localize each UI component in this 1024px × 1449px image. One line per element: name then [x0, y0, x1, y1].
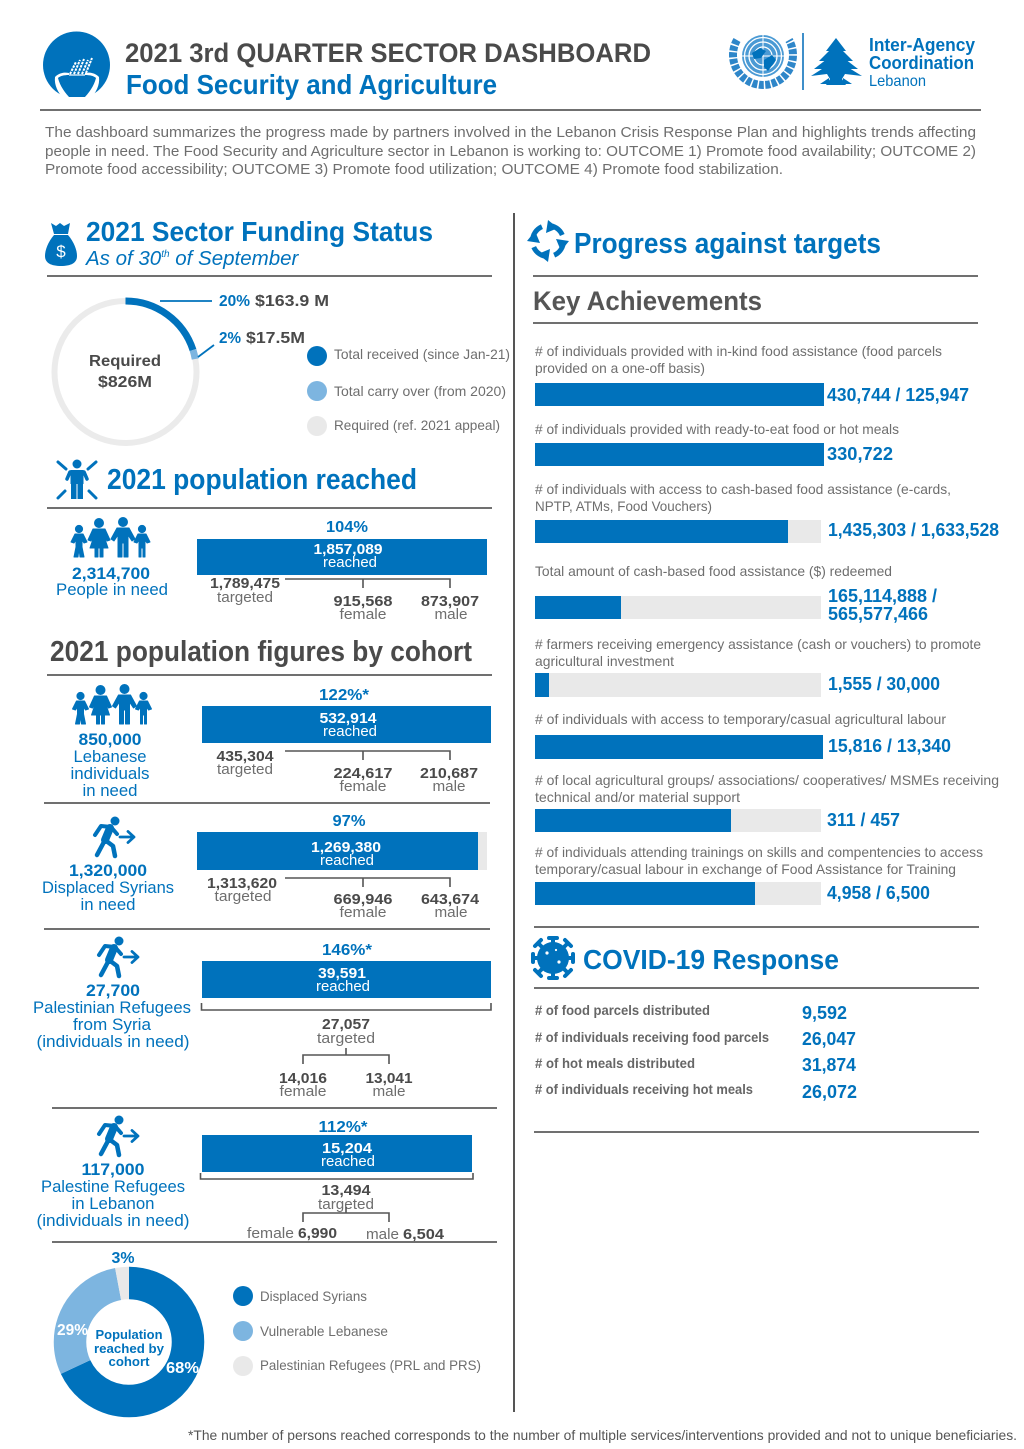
stat: Lebanese in need: Lebanese: [74, 747, 146, 766]
legend: cohort: Vulnerable Lebanese: [260, 1323, 388, 1339]
icon: food security wheat bowl: [43, 32, 110, 100]
panel: COVID-19 response: [532, 937, 979, 1102]
indicator: cash-based assistance: 1,435,303 / 1,633,528: [828, 520, 999, 540]
bar: Lebanese reached: reached: [323, 723, 377, 740]
row: individuals receiving food parcels: 26,047: [802, 1029, 856, 1049]
row: food parcels distributed: 9,592: [802, 1003, 847, 1023]
breakdown: targeted total: 915,568: [334, 594, 392, 610]
indicator: cash-based assistance: NPTP, ATMs, Food Vouchers): [535, 498, 712, 514]
chart: population by cohort donut: [57, 1250, 199, 1401]
breakdown: PRL targeted: targeted: [318, 1196, 374, 1213]
indicator: farmers assistance: [535, 636, 981, 697]
stat: people in need: [56, 564, 168, 599]
legend: funding: Required (ref. 2021 appeal): [334, 417, 500, 433]
indicator: in-kind food assistance: # of individuals provided with in-kind food assistance (food parcels: [535, 343, 942, 359]
stat: Lebanese in need: 850,000: [78, 730, 142, 749]
indicator: agricultural labour: [535, 711, 951, 759]
indicator: in-kind food assistance: 430,744 / 125,947: [827, 385, 969, 405]
stat: people in need: People in need: [56, 580, 168, 599]
breakdown: Lebanese targeted: targeted: [217, 761, 273, 778]
stat: PRS in need: (individuals in need): [36, 1032, 190, 1051]
breakdown: Syrians targeted: [207, 876, 479, 921]
bar: PRS reached: reached: [316, 978, 370, 995]
indicator: in-kind food assistance: provided on a one-off basis): [535, 360, 705, 376]
icon: runner with arrow: [99, 936, 138, 976]
indicator: local agricultural groups: technical and/or material support: [535, 789, 740, 805]
row: individuals receiving food parcels: [535, 1029, 856, 1049]
logo text: Inter-Agency Coordination: Coordination: [869, 53, 974, 73]
indicator: trainings: 4,958 / 6,500: [827, 883, 930, 903]
stat: Lebanese in need: individuals: [70, 764, 150, 783]
panel: progress against targets: [527, 220, 999, 905]
divider in logo: [802, 33, 804, 90]
breakdown: Syrians targeted: female: [340, 904, 386, 921]
bar: Lebanese reached: 532,914: [320, 711, 376, 727]
date note: [84, 247, 300, 270]
panel: funding status: [45, 216, 510, 443]
icon: person with rays: [58, 460, 96, 499]
indicator: cash redeemed: 165,114,888 /: [828, 586, 937, 606]
stat: Syrians in need: in need: [80, 895, 136, 914]
chart: population by cohort donut: 68%: [166, 1360, 199, 1377]
legend: funding: Total received (since Jan-21): [334, 346, 510, 362]
breakdown: PRL targeted: female: [247, 1225, 294, 1242]
callout: 2 percent: $17.5M: [246, 330, 305, 347]
icon: runner with arrow: [99, 1116, 138, 1155]
breakdown: targeted total: targeted: [217, 589, 273, 606]
icon: money bag: [45, 223, 77, 266]
indicator: cash redeemed: Total amount of cash-based food assistance ($) redeemed: [535, 563, 892, 579]
indicator: in-kind food assistance: [535, 343, 969, 406]
breakdown: targeted total: male: [434, 606, 468, 623]
indicator: local agricultural groups: # of local agricultural groups/ associations/ cooperatives/ MSMEs receiving: [535, 772, 999, 788]
bar: reached total: 104%: [326, 519, 368, 536]
bar: PRL reached: 15,204: [322, 1141, 372, 1157]
breakdown: Syrians targeted: 669,946: [334, 892, 392, 908]
breakdown: Lebanese targeted: 210,687: [420, 766, 478, 782]
indicator: trainings: temporary/casual labour in exchange of Food Assistance for Training: [535, 861, 956, 877]
indicator: agricultural labour: 15,816 / 13,340: [828, 736, 951, 756]
header: [43, 32, 975, 100]
breakdown: PRL targeted: 6,504: [403, 1227, 444, 1243]
legend: cohort: Displaced Syrians: [260, 1288, 367, 1304]
chart: funding ring: $826M: [98, 374, 152, 391]
chart: funding ring: [54, 301, 196, 443]
row: food parcels distributed: [535, 1003, 847, 1023]
breakdown: PRS targeted: targeted: [317, 1030, 375, 1047]
indicator: ready-to-eat meals: [535, 421, 899, 466]
breakdown: targeted total: 873,907: [421, 594, 479, 610]
indicator: agricultural labour: # of individuals with access to temporary/casual agricultural labour: [535, 711, 946, 727]
bar: reached total: reached: [323, 554, 377, 571]
row: hot meals distributed: # of hot meals distributed: [535, 1056, 695, 1071]
bar: PRL reached: [202, 1119, 472, 1172]
bar: PRL reached: 112%*: [318, 1119, 368, 1136]
breakdown: Syrians targeted: targeted: [214, 888, 272, 905]
logo text: Inter-Agency Coordination: [869, 35, 975, 90]
panel: Lebanese cohort: [70, 684, 491, 800]
row: hot meals distributed: [535, 1055, 856, 1075]
callout: 2 percent: 2%: [219, 330, 241, 347]
legend: cohort: [233, 1286, 481, 1376]
breakdown: Syrians targeted: 1,313,620: [207, 876, 277, 892]
stat: PRL in need: in Lebanon: [72, 1194, 154, 1213]
title: 2021 3rd QUARTER SECTOR DASHBOARD: [125, 38, 651, 68]
bar: PRL reached: reached: [321, 1153, 375, 1170]
bar: PRS reached: 146%*: [322, 942, 373, 959]
bar: Lebanese reached: [202, 687, 491, 743]
breakdown: Lebanese targeted: 224,617: [334, 766, 392, 782]
date note: th: [161, 249, 170, 260]
stat: PRL in need: [36, 1160, 190, 1230]
chart: population by cohort donut: reached by: [94, 1341, 165, 1356]
breakdown: Lebanese targeted: male: [432, 778, 466, 795]
heading: figures by cohort: 2021 population figures by cohort: [50, 636, 472, 668]
breakdown: Syrians targeted: 643,674: [421, 892, 479, 908]
bar: Syrians reached: 1,269,380: [311, 840, 381, 856]
heading: progress: Progress against targets: [574, 228, 881, 260]
date note: of September: [170, 247, 300, 270]
heading: funding: 2021 Sector Funding Status: [86, 216, 433, 247]
stat: Syrians in need: 1,320,000: [69, 861, 147, 880]
icon: cycle arrows: [527, 220, 569, 262]
callout: 20 percent: $163.9 M: [255, 293, 329, 310]
breakdown: targeted total: 1,789,475: [210, 576, 280, 592]
panel: Palestine Refugees in Lebanon cohort: [36, 1116, 473, 1243]
chart: population by cohort donut: 3%: [112, 1250, 134, 1267]
heading: population reached: 2021 population reached: [107, 464, 417, 496]
chart: funding ring: Required: [89, 353, 161, 370]
icon: virus: [532, 937, 574, 979]
intro text: Promote food accessibility; OUTCOME 3) Promote food utilization; OUTCOME 4) Promote food stabilization.: [45, 162, 783, 178]
stat: PRL in need: Palestine Refugees: [41, 1177, 185, 1196]
logo text: Inter-Agency Coordination: Lebanon: [869, 73, 926, 90]
intro text: people in need. The Food Security and Agriculture sector in Lebanon is working to: OUTCOME 1) Promote food availability; OUTCOME 2): [45, 144, 976, 160]
breakdown: PRS targeted: 13,041: [366, 1071, 412, 1087]
heading: key achievements: Key Achievements: [533, 286, 762, 316]
date note: As of 30: [86, 247, 161, 270]
indicator: cash redeemed: 565,577,466: [828, 604, 928, 624]
indicator: local agricultural groups: [535, 772, 999, 832]
stat: PRS in need: [33, 981, 191, 1051]
bar: PRS reached: 39,591: [318, 966, 366, 982]
breakdown: targeted total: female: [340, 606, 386, 623]
chart: population by cohort donut: 29%: [57, 1322, 88, 1339]
bar: Syrians reached: [197, 813, 487, 870]
icon: runner with arrow: [95, 816, 134, 856]
indicator: trainings: # of individuals attending trainings on skills and compentencies to access: [535, 844, 983, 860]
subtitle: Food Security and Agriculture: [126, 69, 497, 100]
stat: PRL in need: (individuals in need): [36, 1211, 190, 1230]
indicator: cash-based assistance: [535, 481, 999, 543]
row: individuals receiving hot meals: 26,072: [802, 1082, 857, 1102]
breakdown: targeted total: [210, 576, 479, 623]
icon: family: [71, 518, 150, 557]
breakdown: PRL targeted: [200, 1173, 473, 1243]
logo: United Nations emblem: [733, 35, 793, 85]
intro text: The dashboard summarizes the progress made by partners involved in the Lebanon Crisis Response Plan and highlights trends affecting: [45, 125, 976, 141]
stat: Syrians in need: Displaced Syrians: [42, 878, 174, 897]
indicator: trainings: [535, 844, 983, 905]
breakdown: PRS targeted: 14,016: [279, 1071, 327, 1087]
row: food parcels distributed: # of food parcels distributed: [535, 1003, 710, 1018]
legend: cohort: Palestinian Refugees (PRL and PRS): [260, 1357, 481, 1373]
footnote: *The number of persons reached corresponds to the number of multiple services/interventions provided and not to unique beneficiaries.: [188, 1427, 1017, 1443]
breakdown: PRS targeted: female: [280, 1083, 326, 1100]
chart: population by cohort donut: cohort: [108, 1354, 150, 1369]
row: individuals receiving food parcels: # of individuals receiving food parcels: [535, 1030, 769, 1045]
panel: Displaced Syrians cohort: [42, 813, 487, 921]
intro text: [45, 125, 976, 178]
stat: PRS in need: Palestinian Refugees: [33, 998, 191, 1017]
indicator: local agricultural groups: 311 / 457: [827, 810, 900, 830]
icon: money bag: $: [56, 242, 66, 261]
callout: 20 percent: [160, 293, 329, 310]
breakdown: PRS targeted: 27,057: [322, 1017, 370, 1033]
chart: population by cohort donut: Population: [96, 1327, 163, 1342]
logo: cedar tree: [811, 38, 862, 85]
bar: reached total: 1,857,089: [314, 542, 382, 558]
indicator: ready-to-eat meals: 330,722: [827, 444, 893, 464]
stat: Syrians in need: [42, 861, 174, 914]
indicator: ready-to-eat meals: # of individuals provided with ready-to-eat food or hot meals: [535, 421, 899, 437]
heading: COVID: COVID-19 Response: [583, 944, 839, 975]
stat: Lebanese in need: [70, 730, 150, 800]
bar: reached total: [197, 519, 487, 575]
indicator: cash redeemed: [535, 563, 937, 624]
breakdown: PRS targeted: [202, 1003, 491, 1100]
stat: PRS in need: from Syria: [73, 1015, 152, 1034]
legend: funding: Total carry over (from 2020): [334, 383, 506, 399]
breakdown: Lebanese targeted: 435,304: [216, 749, 274, 765]
stat: people in need: 2,314,700: [72, 564, 150, 583]
bar: PRS reached: [202, 942, 491, 998]
stat: Lebanese in need: in need: [82, 781, 138, 800]
bar: Lebanese reached: 122%*: [319, 687, 370, 704]
breakdown: PRS targeted: male: [372, 1083, 406, 1100]
legend: funding: [307, 346, 510, 436]
breakdown: Lebanese targeted: [216, 749, 478, 795]
row: individuals receiving hot meals: [535, 1082, 857, 1102]
indicator: cash-based assistance: # of individuals with access to cash-based food assistance (e-cards,: [535, 481, 951, 497]
stat: PRS in need: 27,700: [86, 981, 140, 1000]
indicator: farmers assistance: agricultural investment: [535, 653, 674, 669]
indicator: farmers assistance: 1,555 / 30,000: [828, 674, 940, 694]
callout: 20 percent: 20%: [219, 293, 250, 310]
breakdown: PRL targeted: 6,990: [298, 1226, 337, 1242]
panel: Palestinian Refugees from Syria cohort: [33, 936, 491, 1100]
row: hot meals distributed: 31,874: [802, 1055, 856, 1075]
panel: population reached: [47, 460, 492, 623]
stat: PRL in need: 117,000: [82, 1160, 144, 1179]
row: individuals receiving hot meals: # of individuals receiving hot meals: [535, 1082, 753, 1097]
indicator: farmers assistance: # farmers receiving emergency assistance (cash or vouchers) to promote: [535, 636, 981, 652]
breakdown: PRL targeted: 13,494: [322, 1183, 370, 1199]
breakdown: Syrians targeted: male: [434, 904, 468, 921]
breakdown: Lebanese targeted: female: [340, 778, 386, 795]
logo text: Inter-Agency Coordination: Inter-Agency: [869, 35, 975, 55]
callout: 2 percent: [198, 330, 305, 357]
bar: Syrians reached: 97%: [332, 813, 366, 830]
bar: Syrians reached: reached: [320, 852, 374, 869]
icon: family: [72, 684, 152, 724]
breakdown: PRL targeted: male: [366, 1226, 399, 1243]
